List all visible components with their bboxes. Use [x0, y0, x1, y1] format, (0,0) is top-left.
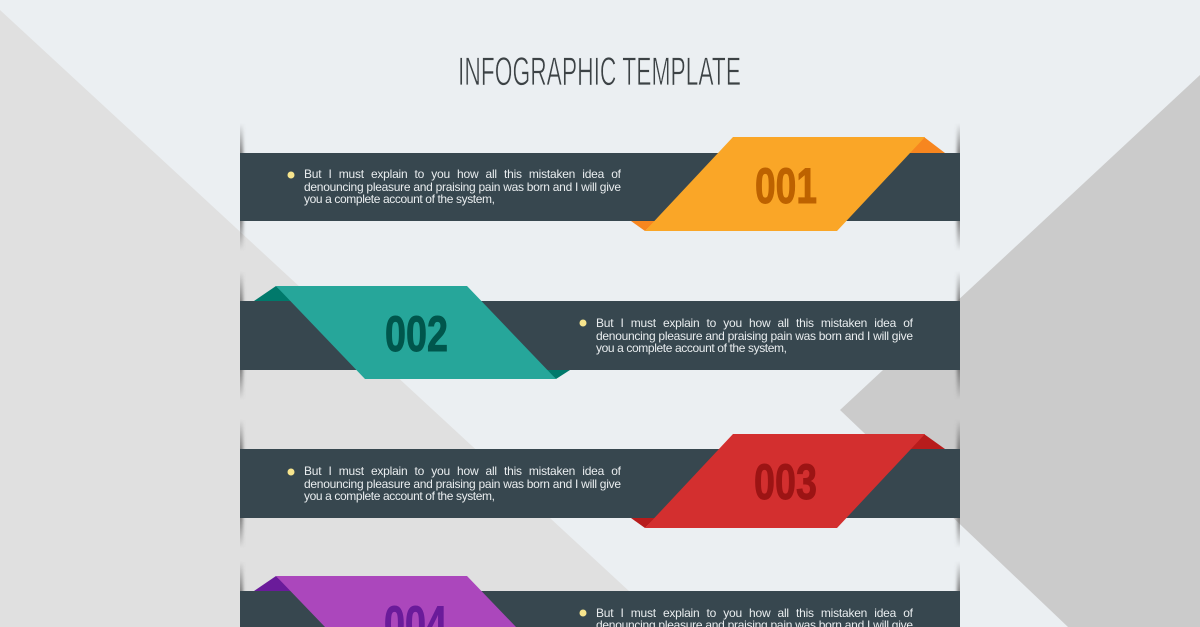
title: INFOGRAPHIC TEMPLATE	[458, 50, 741, 94]
text 003: denouncing pleasure and praising pain was born and I will give	[304, 477, 621, 491]
background shape: left light gray triangle	[0, 10, 668, 627]
ribbon 004	[276, 576, 516, 627]
text 001: But I must explain to you how all this mistaken idea of	[304, 167, 622, 181]
edge shadows	[238, 123, 962, 591]
ribbon 003	[645, 434, 925, 528]
text 003: you a complete account of the system,	[304, 489, 495, 503]
fold bottom 002	[546, 370, 570, 379]
text 003	[304, 464, 622, 503]
fold top 003	[909, 434, 945, 449]
bar 004	[240, 591, 960, 627]
text 003: But I must explain to you how all this mistaken idea of	[304, 464, 622, 478]
number 003: 003	[754, 454, 817, 510]
fold top 002	[254, 286, 292, 301]
number 001: 001	[755, 158, 817, 214]
text 004: But I must explain to you how all this mistaken idea of	[596, 606, 914, 620]
text 001: you a complete account of the system,	[304, 192, 495, 206]
fold top 001	[909, 137, 945, 153]
number 002: 002	[385, 306, 448, 362]
text 002: denouncing pleasure and praising pain was born and I will give	[596, 329, 913, 343]
text 004	[596, 606, 914, 627]
bullet 002	[580, 320, 586, 326]
text 002	[596, 316, 914, 355]
bar 002	[240, 301, 960, 370]
panel: step 004	[240, 576, 960, 627]
panel: step 001	[240, 137, 960, 231]
ribbon 002	[276, 286, 556, 379]
bar 003	[240, 449, 960, 518]
fold bottom 001	[631, 221, 655, 231]
text 002: you a complete account of the system,	[596, 341, 787, 355]
fold bottom 003	[631, 518, 655, 528]
panel: step 003	[240, 434, 960, 528]
fold top 004	[254, 576, 292, 591]
bullet 001	[288, 172, 294, 178]
bullet 004	[580, 610, 586, 616]
background shape: right dark gray triangle	[840, 75, 1200, 627]
text 001: denouncing pleasure and praising pain was born and I will give	[304, 180, 621, 194]
text 002: But I must explain to you how all this mistaken idea of	[596, 316, 914, 330]
text 001	[304, 167, 622, 206]
panel: step 002	[240, 286, 960, 379]
ribbon 001	[645, 137, 925, 231]
bar 001	[240, 153, 960, 221]
bullet 003	[288, 468, 294, 476]
